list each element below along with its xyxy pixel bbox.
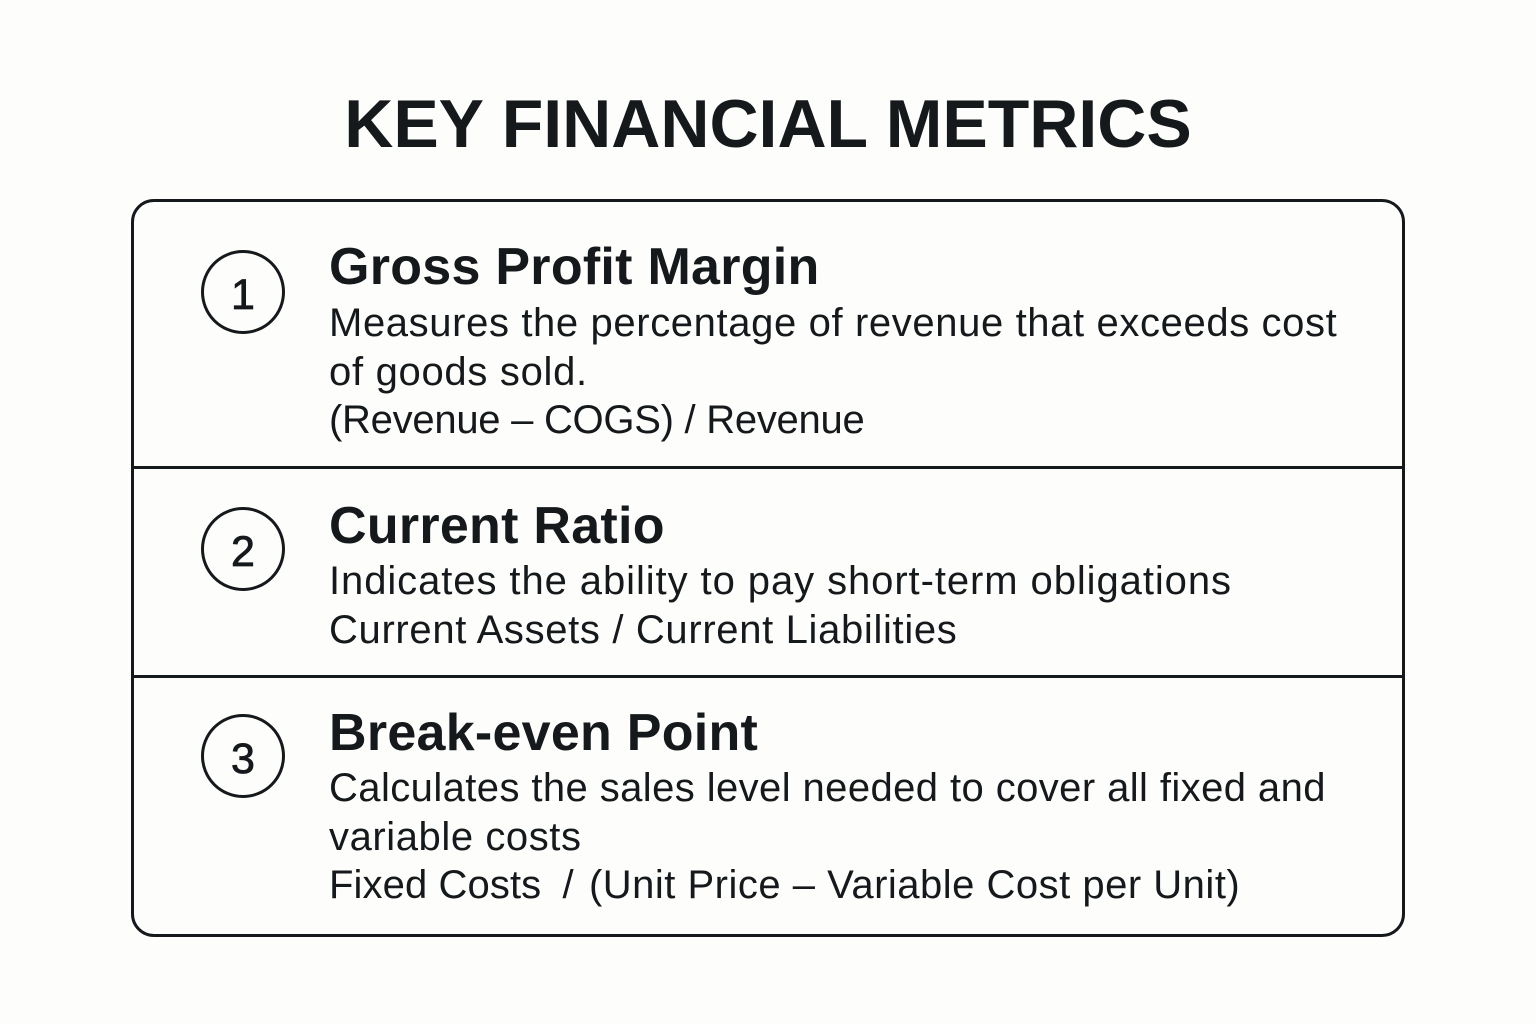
heading: break-even point: Break-even Point xyxy=(329,704,758,762)
text: current ratio description xyxy=(329,559,1232,652)
icon: number 1 xyxy=(201,250,285,334)
text: current ratio description: Current Assets / Current Liabilities xyxy=(329,608,957,652)
text: gross profit margin description: (Revenue – COGS) / Revenue xyxy=(329,398,864,442)
icon: number 2 xyxy=(201,507,285,591)
title: KEY FINANCIAL METRICS xyxy=(344,86,1192,162)
text: break-even description: Calculates the sales level needed to cover all fixed and xyxy=(329,766,1326,810)
text: break-even description xyxy=(329,766,1326,907)
icon: number 3 xyxy=(201,714,285,798)
text: break-even description: variable costs xyxy=(329,814,582,858)
panel: metrics table xyxy=(131,199,1405,937)
icon: number 3: 3 xyxy=(231,735,255,783)
text: current ratio description: Indicates the ability to pay short-term obligations xyxy=(329,559,1232,603)
icon: number 1: 1 xyxy=(231,271,255,319)
heading: gross profit margin: Gross Profit Margin xyxy=(329,238,820,296)
text: gross profit margin description: Measures the percentage of revenue that exceeds cost xyxy=(329,301,1337,345)
text: gross profit margin description: of goods sold. xyxy=(329,350,588,394)
heading: current ratio: Current Ratio xyxy=(329,497,665,555)
text: break-even description: Fixed Costs / (Unit Price – Variable Cost per Unit) xyxy=(329,863,1240,907)
text: gross profit margin description xyxy=(329,301,1337,442)
icon: number 2: 2 xyxy=(231,528,255,576)
